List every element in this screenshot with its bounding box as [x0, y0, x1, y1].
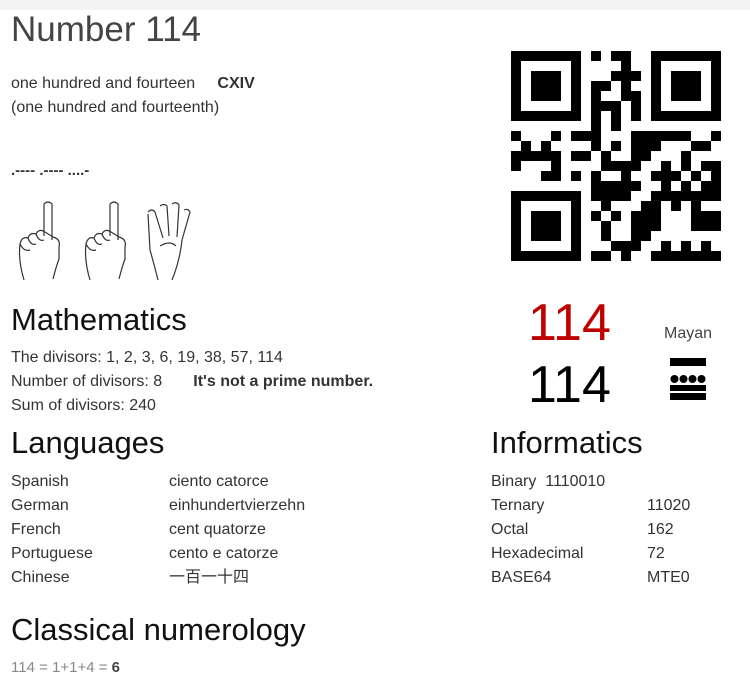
numerology sum: 114 = 1+1+4 = 6: [11, 659, 120, 676]
number name text: (one hundred and fourteenth): [11, 99, 219, 116]
informatics table: Octal: [491, 521, 528, 538]
heading: Mathematics: Mathematics: [11, 302, 187, 337]
icon: sign language hands: [18, 201, 191, 280]
big number black: 114: [528, 356, 611, 414]
informatics table: 72: [647, 545, 665, 562]
Mayan label: Mayan: [664, 325, 712, 342]
informatics table: 11020: [647, 497, 690, 514]
languages table: cent quatorze: [169, 521, 266, 538]
languages table: Portuguese: [11, 545, 93, 562]
number name text: one hundred and fourteen CXIV: [11, 75, 255, 92]
languages table: einhundertvierzehn: [169, 497, 305, 514]
languages table: Spanish: [11, 473, 69, 490]
math facts: The divisors: 1, 2, 3, 6, 19, 38, 57, 114: [11, 349, 283, 366]
QR code: [511, 51, 721, 261]
informatics table: Ternary: [491, 497, 544, 514]
top strip: [0, 0, 750, 10]
math facts: Number of divisors: 8 It's not a prime number.: [11, 373, 373, 390]
languages table: German: [11, 497, 69, 514]
heading: Classical numerology: Classical numerology: [11, 612, 306, 647]
title: Number 114: [11, 10, 201, 49]
informatics table: Binary 1110010: [491, 473, 605, 490]
informatics table: 162: [647, 521, 674, 538]
number name text: [11, 75, 255, 116]
informatics table: MTE0: [647, 569, 690, 586]
informatics table: [491, 473, 690, 586]
informatics table: BASE64: [491, 569, 551, 586]
languages table: ciento catorce: [169, 473, 269, 490]
heading: Informatics: Informatics: [491, 425, 643, 460]
languages table: 一百一十四: [169, 569, 249, 586]
languages table: [11, 473, 305, 586]
math facts: [11, 349, 373, 414]
languages table: Chinese: [11, 569, 70, 586]
languages table: cento e catorze: [169, 545, 278, 562]
icon: mayan numeral: [670, 358, 706, 400]
heading: Languages: Languages: [11, 425, 164, 460]
morse code: .---- .---- ....-: [11, 162, 89, 179]
languages table: French: [11, 521, 61, 538]
math facts: Sum of divisors: 240: [11, 397, 156, 414]
informatics table: Hexadecimal: [491, 545, 583, 562]
big number red: 114: [528, 294, 611, 352]
